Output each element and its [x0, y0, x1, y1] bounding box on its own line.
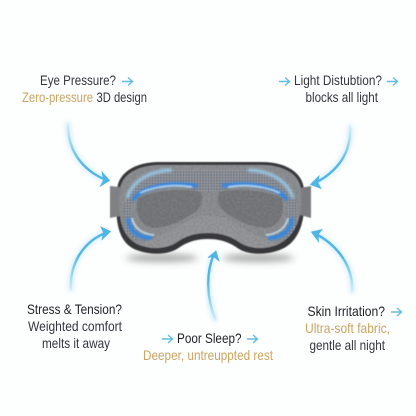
text: stress and tension: melts it away — [42, 335, 110, 351]
text: stress and tension — [27, 301, 122, 351]
sleep mask product — [110, 160, 311, 262]
icon: left arrow — [279, 78, 290, 86]
outer shell — [116, 162, 304, 254]
right strap — [300, 186, 311, 218]
heading: light disturbance: Light Distubtion? — [294, 72, 382, 88]
text: zero-pressure 3D design: 3D design — [96, 89, 147, 105]
left strap — [110, 186, 120, 218]
arrow: poor sleep to mask — [208, 251, 219, 321]
text: poor sleep — [143, 330, 273, 363]
blue glow: arcs — [127, 170, 293, 238]
fabric face — [119, 164, 302, 249]
arrow: light to mask — [310, 125, 350, 188]
arrow: skin irritation to mask — [312, 230, 352, 293]
heading: eye pressure: Eye Pressure? — [40, 72, 116, 88]
text: stress and tension: Stress & Tension? — [27, 301, 122, 317]
text: blocks all light: blocks all light — [306, 89, 378, 105]
left eye recess — [137, 190, 202, 228]
text: stress and tension: Weighted comfort — [28, 318, 122, 334]
right eye recess — [218, 190, 283, 228]
arrow: eye pressure to mask — [68, 122, 110, 186]
mesh band: top — [124, 170, 297, 240]
text: skin irritation: Skin Irritation? — [308, 303, 385, 319]
icon: right arrow — [122, 78, 132, 86]
text: poor sleep: Poor Sleep? — [177, 330, 242, 346]
text: poor sleep: Deeper, untreuppted rest — [143, 347, 273, 363]
text: skin irritation: Ultra-soft fabric, — [305, 320, 390, 336]
arrow: stress to mask — [71, 227, 110, 291]
highlight arcs — [132, 186, 288, 235]
text: skin irritation — [305, 303, 402, 353]
text: zero-pressure 3D design: Zero-pressure — [22, 89, 93, 105]
text: skin irritation: gentle all night — [310, 337, 385, 353]
mask shadows — [126, 254, 294, 262]
nose ridge — [139, 216, 278, 248]
